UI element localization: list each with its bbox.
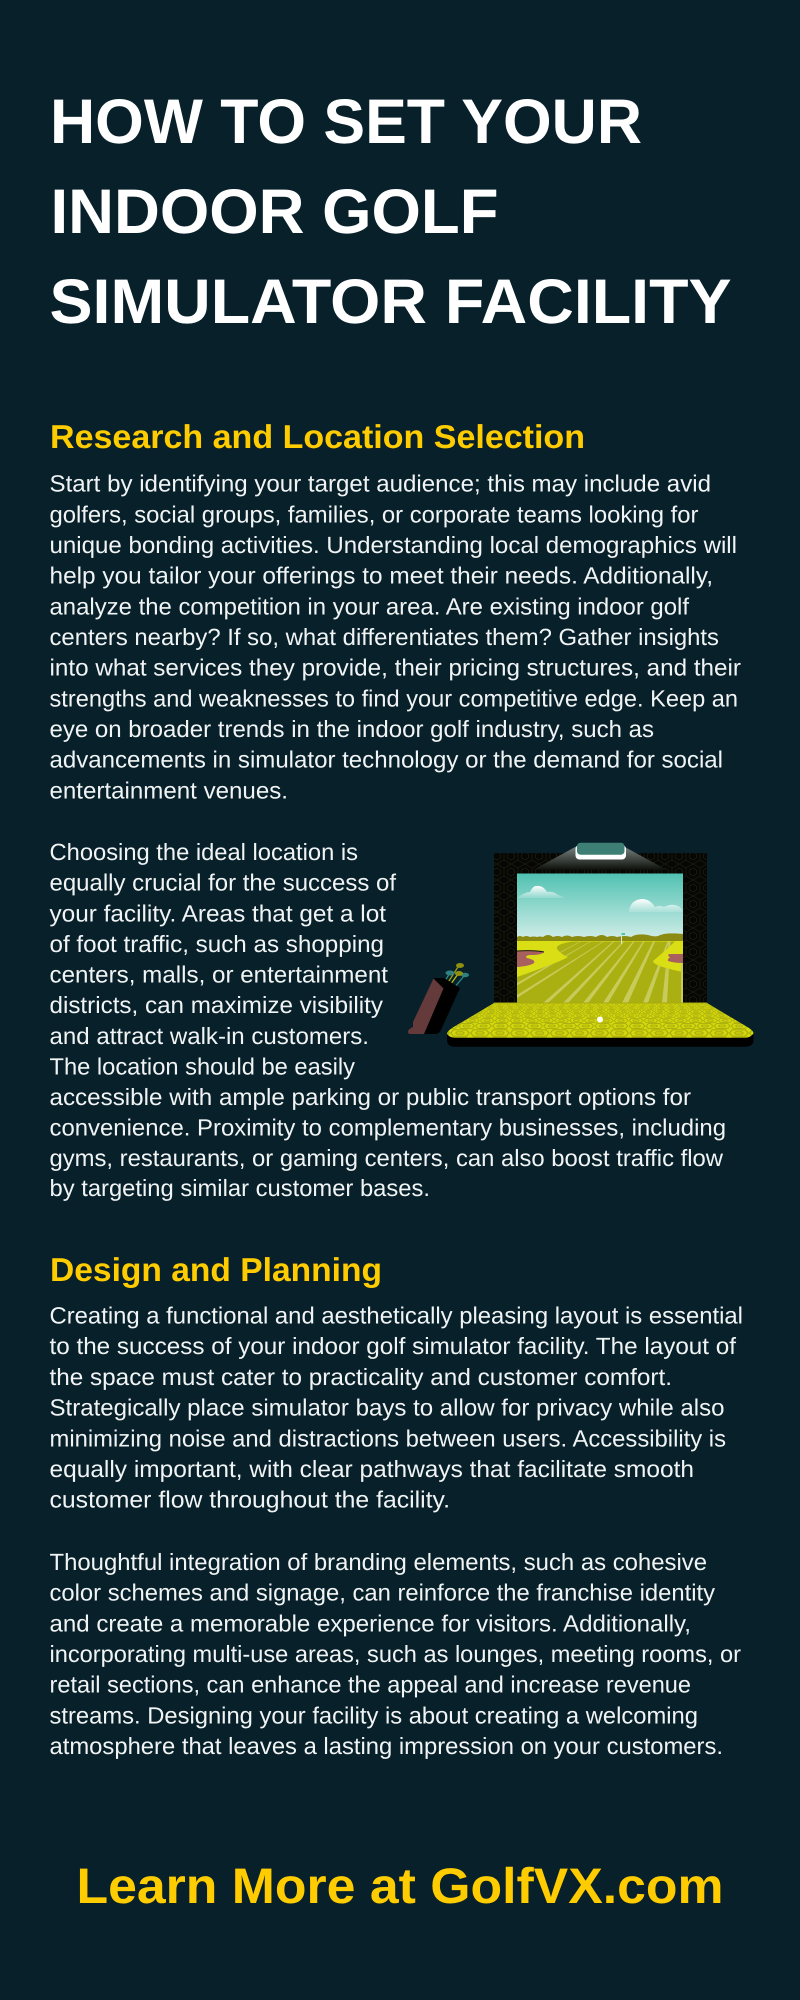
text block: research paragraph: entertainment venues. bbox=[50, 777, 288, 803]
text block: location paragraph: of foot traffic, such as shopping bbox=[50, 931, 384, 957]
title bbox=[50, 87, 732, 337]
grass bbox=[517, 941, 683, 977]
projector bbox=[576, 843, 626, 860]
text block: research paragraph: analyze the competition in your area. Are existing indoor golf bbox=[50, 593, 689, 619]
text block: branding paragraph bbox=[50, 1549, 741, 1759]
text block: research paragraph: strengths and weaknesses to find your competitive edge. Keep an bbox=[50, 685, 738, 711]
fairway with stripes bbox=[517, 941, 683, 1003]
text block: location paragraph: accessible with ample parking or public transport options for bbox=[50, 1084, 691, 1110]
text block: layout paragraph: customer flow throughout the facility. bbox=[50, 1487, 450, 1513]
text block: location paragraph: and attract walk-in customers. bbox=[50, 1023, 369, 1049]
text block: branding paragraph: color schemes and signage, can reinforce the franchise identity bbox=[50, 1580, 715, 1606]
text block: research paragraph: advancements in simulator technology or the demand for social bbox=[50, 747, 723, 773]
text block: location paragraph: gyms, restaurants, or gaming centers, can also boost traffic flow bbox=[50, 1145, 724, 1171]
sky bbox=[517, 873, 683, 937]
text block: branding paragraph: streams. Designing your facility is about creating a welcoming bbox=[50, 1702, 698, 1728]
text block: layout paragraph: to the success of your indoor golf simulator facility. The layout of bbox=[50, 1333, 736, 1359]
text block: layout paragraph: Strategically place simulator bays to allow for privacy while also bbox=[50, 1395, 724, 1421]
text block: layout paragraph: Creating a functional and aesthetically pleasing layout is essential bbox=[50, 1302, 743, 1328]
clouds bbox=[517, 886, 683, 912]
text block: layout paragraph: equally important, with clear pathways that facilitate smooth bbox=[50, 1456, 694, 1482]
text block: branding paragraph: atmosphere that leaves a lasting impression on your customers. bbox=[50, 1733, 723, 1759]
bunkers bbox=[517, 951, 544, 967]
text block: branding paragraph: incorporating multi-use areas, such as lounges, meeting rooms, or bbox=[50, 1641, 741, 1667]
title: SIMULATOR FACILITY bbox=[50, 267, 732, 337]
text block: branding paragraph: Thoughtful integration of branding elements, such as cohesive bbox=[50, 1549, 707, 1575]
tee mat base bbox=[447, 1034, 754, 1047]
title: HOW TO SET YOUR bbox=[50, 87, 642, 157]
text block: layout paragraph bbox=[50, 1302, 743, 1513]
flag bbox=[622, 933, 625, 944]
text block: location paragraph: by targeting similar customer bases. bbox=[50, 1175, 430, 1201]
text block: research paragraph: eye on broader trends in the indoor golf industry, such as bbox=[50, 716, 654, 742]
text block: branding paragraph: retail sections, can enhance the appeal and increase revenue bbox=[50, 1672, 691, 1698]
text block: branding paragraph: and create a memorable experience for visitors. Additionally, bbox=[50, 1610, 691, 1636]
icon: golf bag bbox=[408, 963, 469, 1034]
heading: Design and Planning: Design and Planning bbox=[50, 1251, 382, 1288]
text block: location paragraph: districts, can maximize visibility bbox=[50, 992, 383, 1018]
text block: research paragraph: into what services they provide, their pricing structures, and their bbox=[50, 655, 741, 681]
title: INDOOR GOLF bbox=[50, 177, 498, 247]
text block: location paragraph: convenience. Proximity to complementary businesses, including bbox=[50, 1115, 726, 1141]
text block: location paragraph bbox=[50, 839, 726, 1201]
call to action: Learn More at GolfVX.com bbox=[76, 1858, 724, 1914]
text block: layout paragraph: the space must cater to practicality and customer comfort. bbox=[50, 1364, 672, 1390]
tee mat bbox=[440, 1003, 760, 1038]
text block: location paragraph: The location should be easily bbox=[50, 1053, 355, 1079]
text block: research paragraph: golfers, social groups, families, or corporate teams looking for bbox=[50, 501, 699, 527]
text block: location paragraph: Choosing the ideal location is bbox=[50, 839, 358, 865]
projector light cone bbox=[533, 846, 667, 870]
tree line bbox=[517, 933, 683, 941]
heading: Research and Location Selection: Research and Location Selection bbox=[50, 418, 585, 455]
text block: location paragraph: centers, malls, or entertainment bbox=[50, 962, 388, 988]
text block: research paragraph: Start by identifying your target audience; this may include avid bbox=[50, 471, 711, 497]
text block: research paragraph: centers nearby? If so, what differentiates them? Gather insights bbox=[50, 624, 719, 650]
screen: golf course bbox=[517, 873, 683, 1003]
text block: location paragraph: your facility. Areas that get a lot bbox=[50, 900, 386, 926]
text block: research paragraph bbox=[50, 471, 741, 803]
golf ball bbox=[597, 1016, 603, 1022]
text block: research paragraph: help you tailor your offerings to meet their needs. Additionally, bbox=[50, 563, 713, 589]
text block: location paragraph: equally crucial for the success of bbox=[50, 870, 396, 896]
text block: layout paragraph: minimizing noise and distractions between users. Accessibility is bbox=[50, 1425, 726, 1451]
illustration: indoor golf simulator bbox=[408, 843, 760, 1047]
text block: research paragraph: unique bonding activities. Understanding local demographics will bbox=[50, 532, 737, 558]
simulator frame bbox=[494, 853, 707, 1003]
